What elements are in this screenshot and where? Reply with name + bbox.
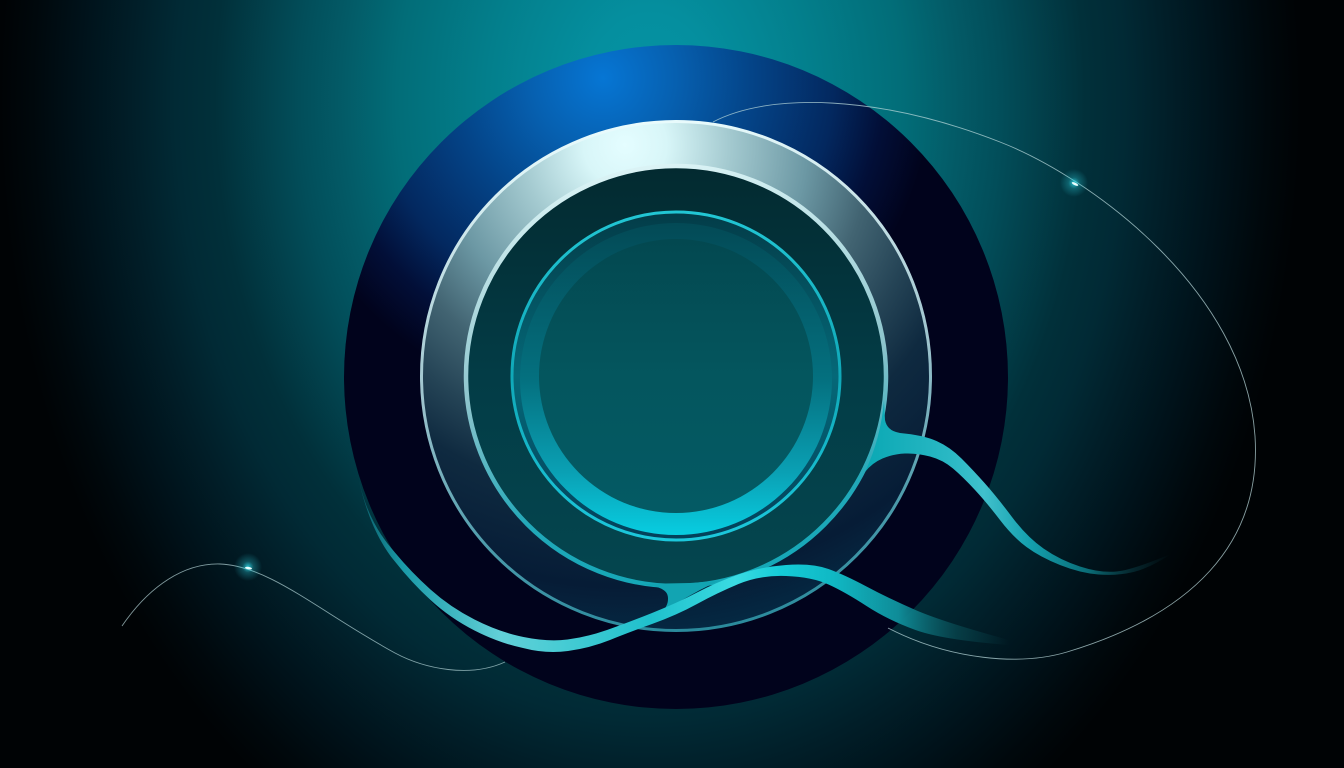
flowing ribbon right <box>865 400 1173 575</box>
thin curve lower left <box>122 564 505 670</box>
spark lower left <box>234 553 262 581</box>
metallic outer ring <box>422 122 930 630</box>
inner glowing ring <box>512 212 840 540</box>
spark upper right <box>1060 169 1088 197</box>
flowing ribbon bottom <box>357 470 1009 652</box>
thin curve upper right <box>713 102 1255 659</box>
ribbon junction bottom <box>640 581 718 610</box>
large dark disc <box>344 45 1008 709</box>
